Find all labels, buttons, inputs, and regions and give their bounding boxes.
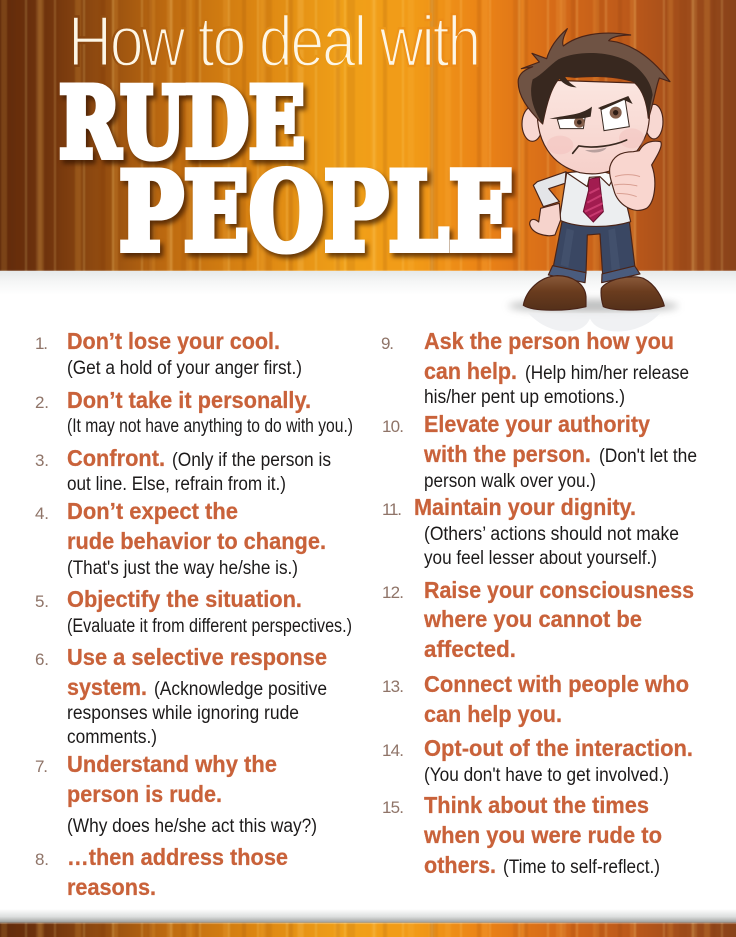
reflection xyxy=(528,313,660,331)
cheeks xyxy=(547,136,573,154)
tip 4: rude behavior to change. xyxy=(67,528,326,554)
tip 6: system. xyxy=(67,674,147,700)
floor shadow xyxy=(508,299,678,313)
tip 3: Confront. xyxy=(67,445,165,471)
tip 15: when you were rude to xyxy=(423,822,662,848)
header striped orange curtain band xyxy=(0,0,736,271)
tip 10: Elevate your authority xyxy=(424,411,650,437)
footer striped orange band xyxy=(0,923,736,937)
tip 7: (Why does he/she act this way?) xyxy=(67,816,317,837)
hair xyxy=(518,29,670,124)
panel: left column of tips xyxy=(35,328,353,900)
tip 14: Opt-out of the interaction. xyxy=(424,735,693,761)
tip 3 xyxy=(35,445,331,495)
tip 1: (Get a hold of your anger first.) xyxy=(67,358,302,379)
shirt xyxy=(559,173,631,226)
tip 6: comments.) xyxy=(67,727,157,748)
left hand xyxy=(530,203,561,236)
tip 9: Ask the person how you xyxy=(424,328,674,354)
tip 1: Don’t lose your cool. xyxy=(67,328,280,354)
tip 6: Use a selective response xyxy=(67,644,327,670)
tip 9: his/her pent up emotions.) xyxy=(424,387,625,408)
tip 2: 2. xyxy=(35,393,49,412)
tip 12: where you cannot be xyxy=(423,606,642,632)
tip 4: 4. xyxy=(35,504,49,523)
tip 13: Connect with people who xyxy=(424,671,689,697)
cartoon man: angry thumbs-up character xyxy=(508,29,678,331)
title xyxy=(59,3,514,276)
panel: right column of tips xyxy=(381,328,697,878)
tip 10: person walk over you.) xyxy=(424,471,596,492)
tip 8: …then address those xyxy=(67,844,288,870)
tip 11: 11. xyxy=(382,500,402,519)
title line: how to deal with: How to deal with xyxy=(68,3,479,82)
eyebrows xyxy=(549,96,633,119)
tip 3: out line. Else, refrain from it.) xyxy=(67,474,286,495)
tip 7: person is rude. xyxy=(67,781,222,807)
tip 9 xyxy=(381,328,689,408)
tip 11: (Others’ actions should not make xyxy=(424,524,679,545)
tip 12: Raise your consciousness xyxy=(424,577,694,603)
collar xyxy=(567,170,615,187)
tip 12: 12. xyxy=(382,583,404,602)
left eye xyxy=(557,116,585,129)
fist with raised thumb xyxy=(610,141,661,210)
tip 5: Objectify the situation. xyxy=(67,586,302,612)
tip 8: 8. xyxy=(35,850,49,869)
tip 10: (Don't let the xyxy=(599,446,697,467)
face xyxy=(537,80,650,174)
tip 5: (Evaluate it from different perspectives.) xyxy=(67,616,352,637)
tip 6: responses while ignoring rude xyxy=(67,703,299,724)
tip 10 xyxy=(382,411,697,492)
tip 9: 9. xyxy=(381,334,394,353)
tip 12: affected. xyxy=(424,636,516,662)
tip 3: 3. xyxy=(35,451,49,470)
tip 8 xyxy=(35,844,288,900)
tip 4: Don’t expect the xyxy=(67,498,238,524)
tip 5 xyxy=(35,586,352,637)
tip 15: Think about the times xyxy=(424,792,649,818)
tip 8: reasons. xyxy=(67,874,156,900)
tip 1: 1. xyxy=(35,334,48,353)
trousers xyxy=(553,218,635,275)
tip 1 xyxy=(35,328,302,379)
tip 14 xyxy=(382,735,693,786)
tip 7: 7. xyxy=(35,757,48,776)
tip 2 xyxy=(35,387,353,437)
mouth xyxy=(573,140,627,153)
tip 14: 14. xyxy=(382,741,404,760)
hair lock on forehead xyxy=(557,74,577,87)
title word: people: PEOPLE xyxy=(119,150,514,276)
tip 5: 5. xyxy=(35,592,49,611)
ears xyxy=(522,107,543,141)
tip 2: Don’t take it personally. xyxy=(67,387,311,413)
tip 11 xyxy=(382,494,679,569)
tip 4 xyxy=(35,498,326,579)
tip 12 xyxy=(382,577,694,662)
tip 7: Understand why the xyxy=(67,751,277,777)
trouser cuffs xyxy=(548,266,640,283)
tip 9: (Help him/her release xyxy=(525,363,689,384)
tip 6: 6. xyxy=(35,650,49,669)
tie xyxy=(583,177,603,222)
tip 15: others. xyxy=(424,852,496,878)
right shoe xyxy=(601,277,664,310)
tip 13 xyxy=(382,671,689,727)
floor highlight below band xyxy=(0,271,736,295)
tip 15: 15. xyxy=(382,798,404,817)
tip 9: can help. xyxy=(424,358,517,384)
lower lip shade xyxy=(585,147,607,152)
tip 13: 13. xyxy=(382,677,404,696)
tip 15: (Time to self-reflect.) xyxy=(503,857,660,878)
sleeve xyxy=(533,172,566,207)
tip 4: (That's just the way he/she is.) xyxy=(67,558,298,579)
tip 14: (You don't have to get involved.) xyxy=(424,765,669,786)
tip 10: with the person. xyxy=(423,441,591,467)
left shoe xyxy=(523,276,586,310)
title word: rude: RUDE xyxy=(59,66,305,180)
tip 11: Maintain your dignity. xyxy=(414,494,636,520)
tip 11: you feel lesser about yourself.) xyxy=(424,548,657,569)
tip 15 xyxy=(382,792,662,878)
right eye xyxy=(601,98,629,131)
tip 3: (Only if the person is xyxy=(172,450,331,471)
dark hair shading xyxy=(531,53,653,124)
footer shadow xyxy=(0,909,736,923)
tip 2: (It may not have anything to do with you.) xyxy=(67,416,353,437)
tip 13: can help you. xyxy=(424,701,562,727)
tip 7 xyxy=(35,751,317,837)
tip 6 xyxy=(35,644,327,748)
tip 10: 10. xyxy=(382,417,404,436)
tip 6: (Acknowledge positive xyxy=(154,679,327,700)
